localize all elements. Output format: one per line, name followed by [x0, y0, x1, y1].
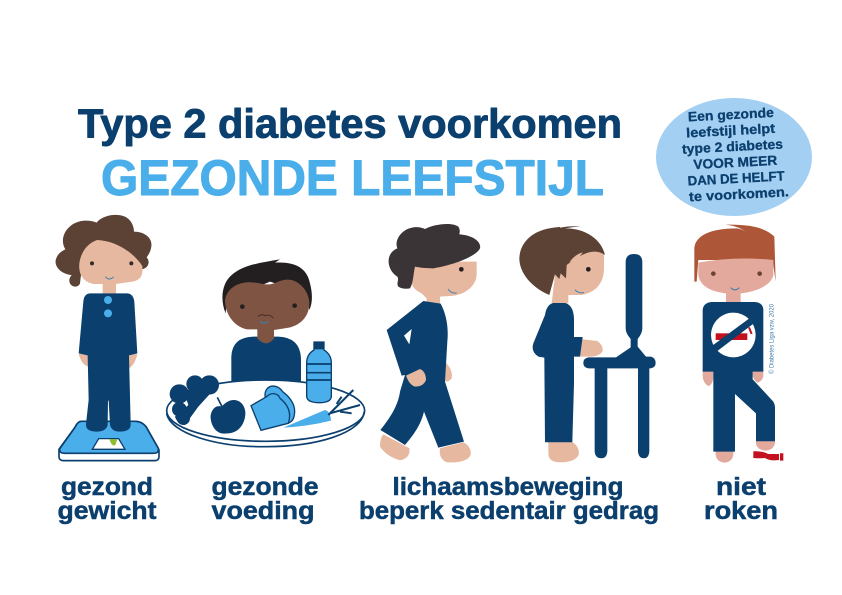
label: healthy weight	[58, 473, 157, 525]
person: standing at table	[519, 225, 656, 462]
body	[380, 301, 464, 448]
face	[412, 262, 477, 305]
hair	[694, 225, 776, 282]
hands	[79, 354, 137, 368]
plate	[167, 380, 365, 441]
table with screen	[583, 254, 656, 458]
callout bubble: DAN DE HELFT	[687, 168, 786, 188]
body	[703, 302, 775, 452]
face	[698, 258, 773, 303]
label: exercise	[359, 473, 659, 525]
person: walking	[380, 224, 480, 462]
label: exercise: beperk sedentair gedrag	[359, 497, 659, 525]
copyright: © Diabetes Liga vzw, 2020	[768, 303, 775, 374]
hair	[56, 215, 151, 287]
title: Type 2 diabetes voorkomen	[78, 100, 622, 146]
front hand	[406, 369, 426, 387]
callout bubble: type 2 diabetes	[682, 136, 783, 157]
feet	[380, 434, 471, 462]
label: exercise: lichaamsbeweging	[392, 473, 624, 501]
person: healthy food with plate	[167, 259, 365, 447]
hair	[222, 259, 312, 313]
label: healthy food: gezonde	[212, 473, 319, 501]
person: not smoking	[694, 225, 783, 463]
icon: carrot	[283, 390, 360, 428]
label: healthy food: voeding	[212, 497, 314, 525]
hand	[580, 339, 603, 357]
callout bubble: Een gezonde	[687, 105, 774, 124]
label: no smoking: roken	[704, 497, 778, 525]
face	[79, 240, 142, 297]
icon: bread	[251, 386, 295, 430]
person: healthy weight on scale	[56, 215, 159, 461]
torso	[231, 337, 301, 382]
label: healthy food	[212, 473, 319, 525]
back hand	[445, 362, 452, 382]
head	[225, 280, 309, 343]
icon: water bottle	[307, 342, 331, 403]
body	[533, 303, 583, 442]
face	[552, 252, 604, 303]
callout bubble: leefstijl helpt	[686, 121, 776, 140]
label: no smoking: niet	[716, 473, 767, 501]
label: healthy weight: gewicht	[58, 497, 157, 525]
body	[79, 293, 137, 432]
icon: stubbed cigarette	[753, 451, 783, 461]
hair	[389, 224, 480, 289]
icon: broccoli	[170, 375, 219, 425]
hair	[519, 226, 605, 295]
icon: apple	[211, 397, 245, 434]
label: no smoking	[704, 473, 778, 525]
callout bubble: VOOR MEER	[693, 153, 778, 172]
callout bubble	[656, 98, 812, 216]
hands and feet	[703, 370, 775, 463]
icon: no smoking	[711, 313, 756, 357]
label: healthy weight: gezond	[61, 473, 153, 501]
foot	[548, 442, 579, 462]
subtitle: GEZONDE LEEFSTIJL	[101, 150, 604, 206]
icon: scale	[59, 421, 159, 461]
callout bubble: te voorkomen.	[689, 184, 789, 204]
